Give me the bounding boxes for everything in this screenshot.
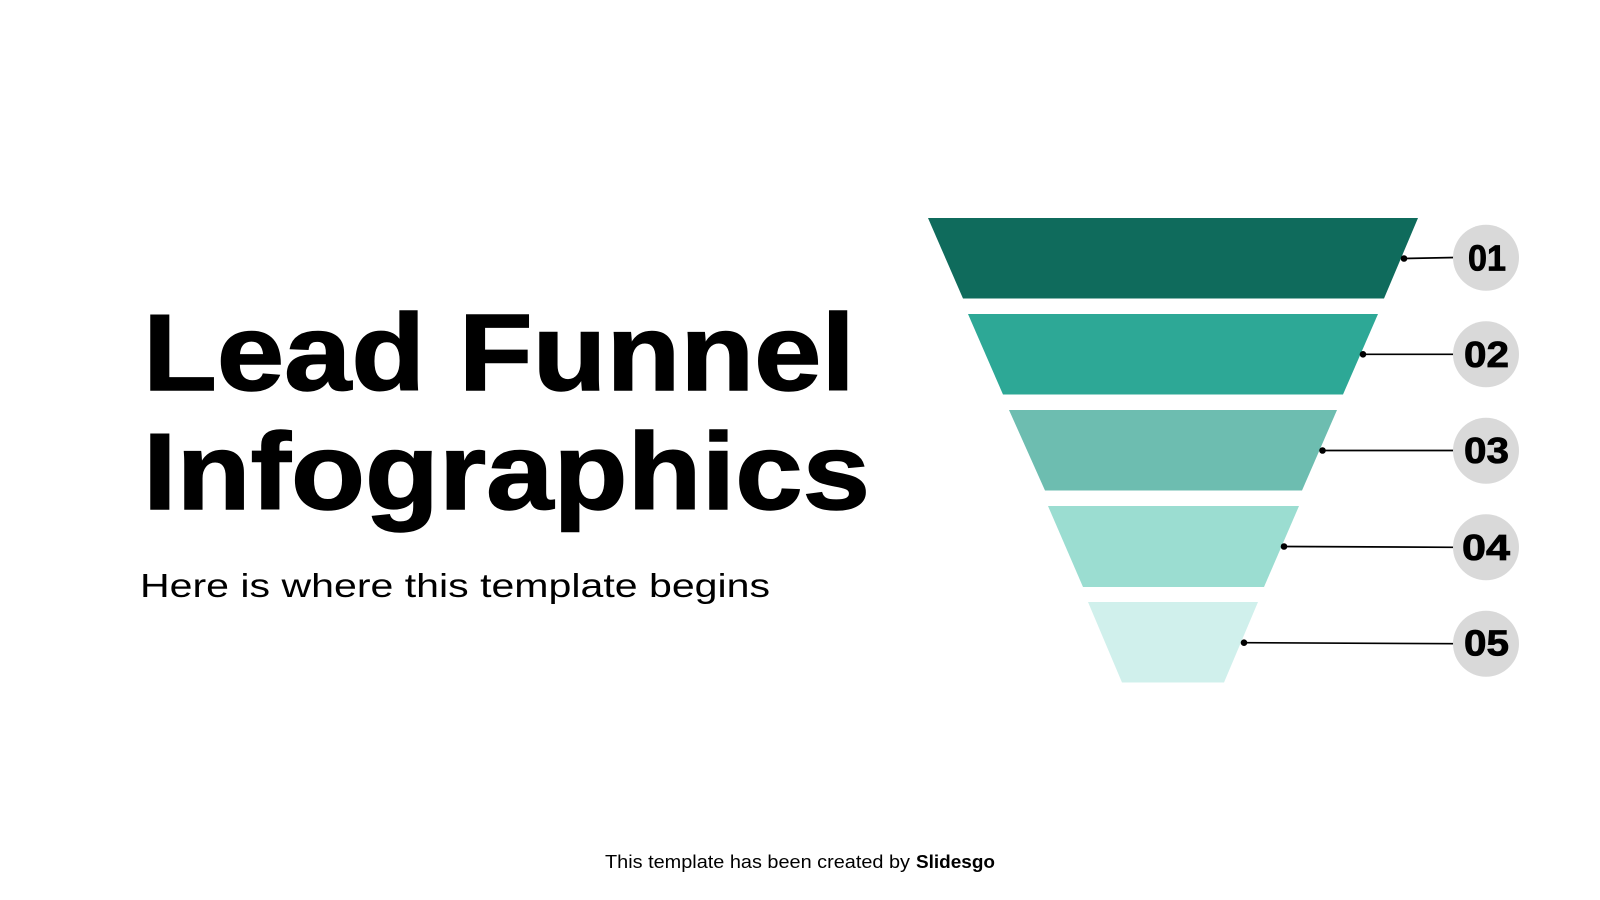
marker 05: 05 [1464,622,1509,664]
footer credit: Slidesgo [916,852,995,872]
marker 04 [1281,514,1519,580]
funnel chart [928,218,1418,682]
footer credit: This template has been created by [605,852,910,872]
marker 05 [1241,611,1519,677]
marker 02: 02 [1464,334,1509,375]
funnel tier 1 [928,218,1418,298]
marker 04: 04 [1462,527,1510,568]
marker 02 [1360,321,1519,387]
marker 03 [1319,418,1519,484]
title [143,292,870,533]
marker 01: 01 [1468,238,1506,278]
title: Infographics [143,411,870,533]
funnel tier 4 [1048,506,1299,587]
marker 03: 03 [1464,430,1509,471]
funnel tier 5 [1088,602,1258,682]
funnel tier 3 [1009,410,1337,490]
title: Lead Funnel [143,292,855,414]
funnel tier 2 [968,314,1378,394]
marker 01 [1401,225,1519,291]
subtitle: Here is where this template begins [140,567,770,604]
